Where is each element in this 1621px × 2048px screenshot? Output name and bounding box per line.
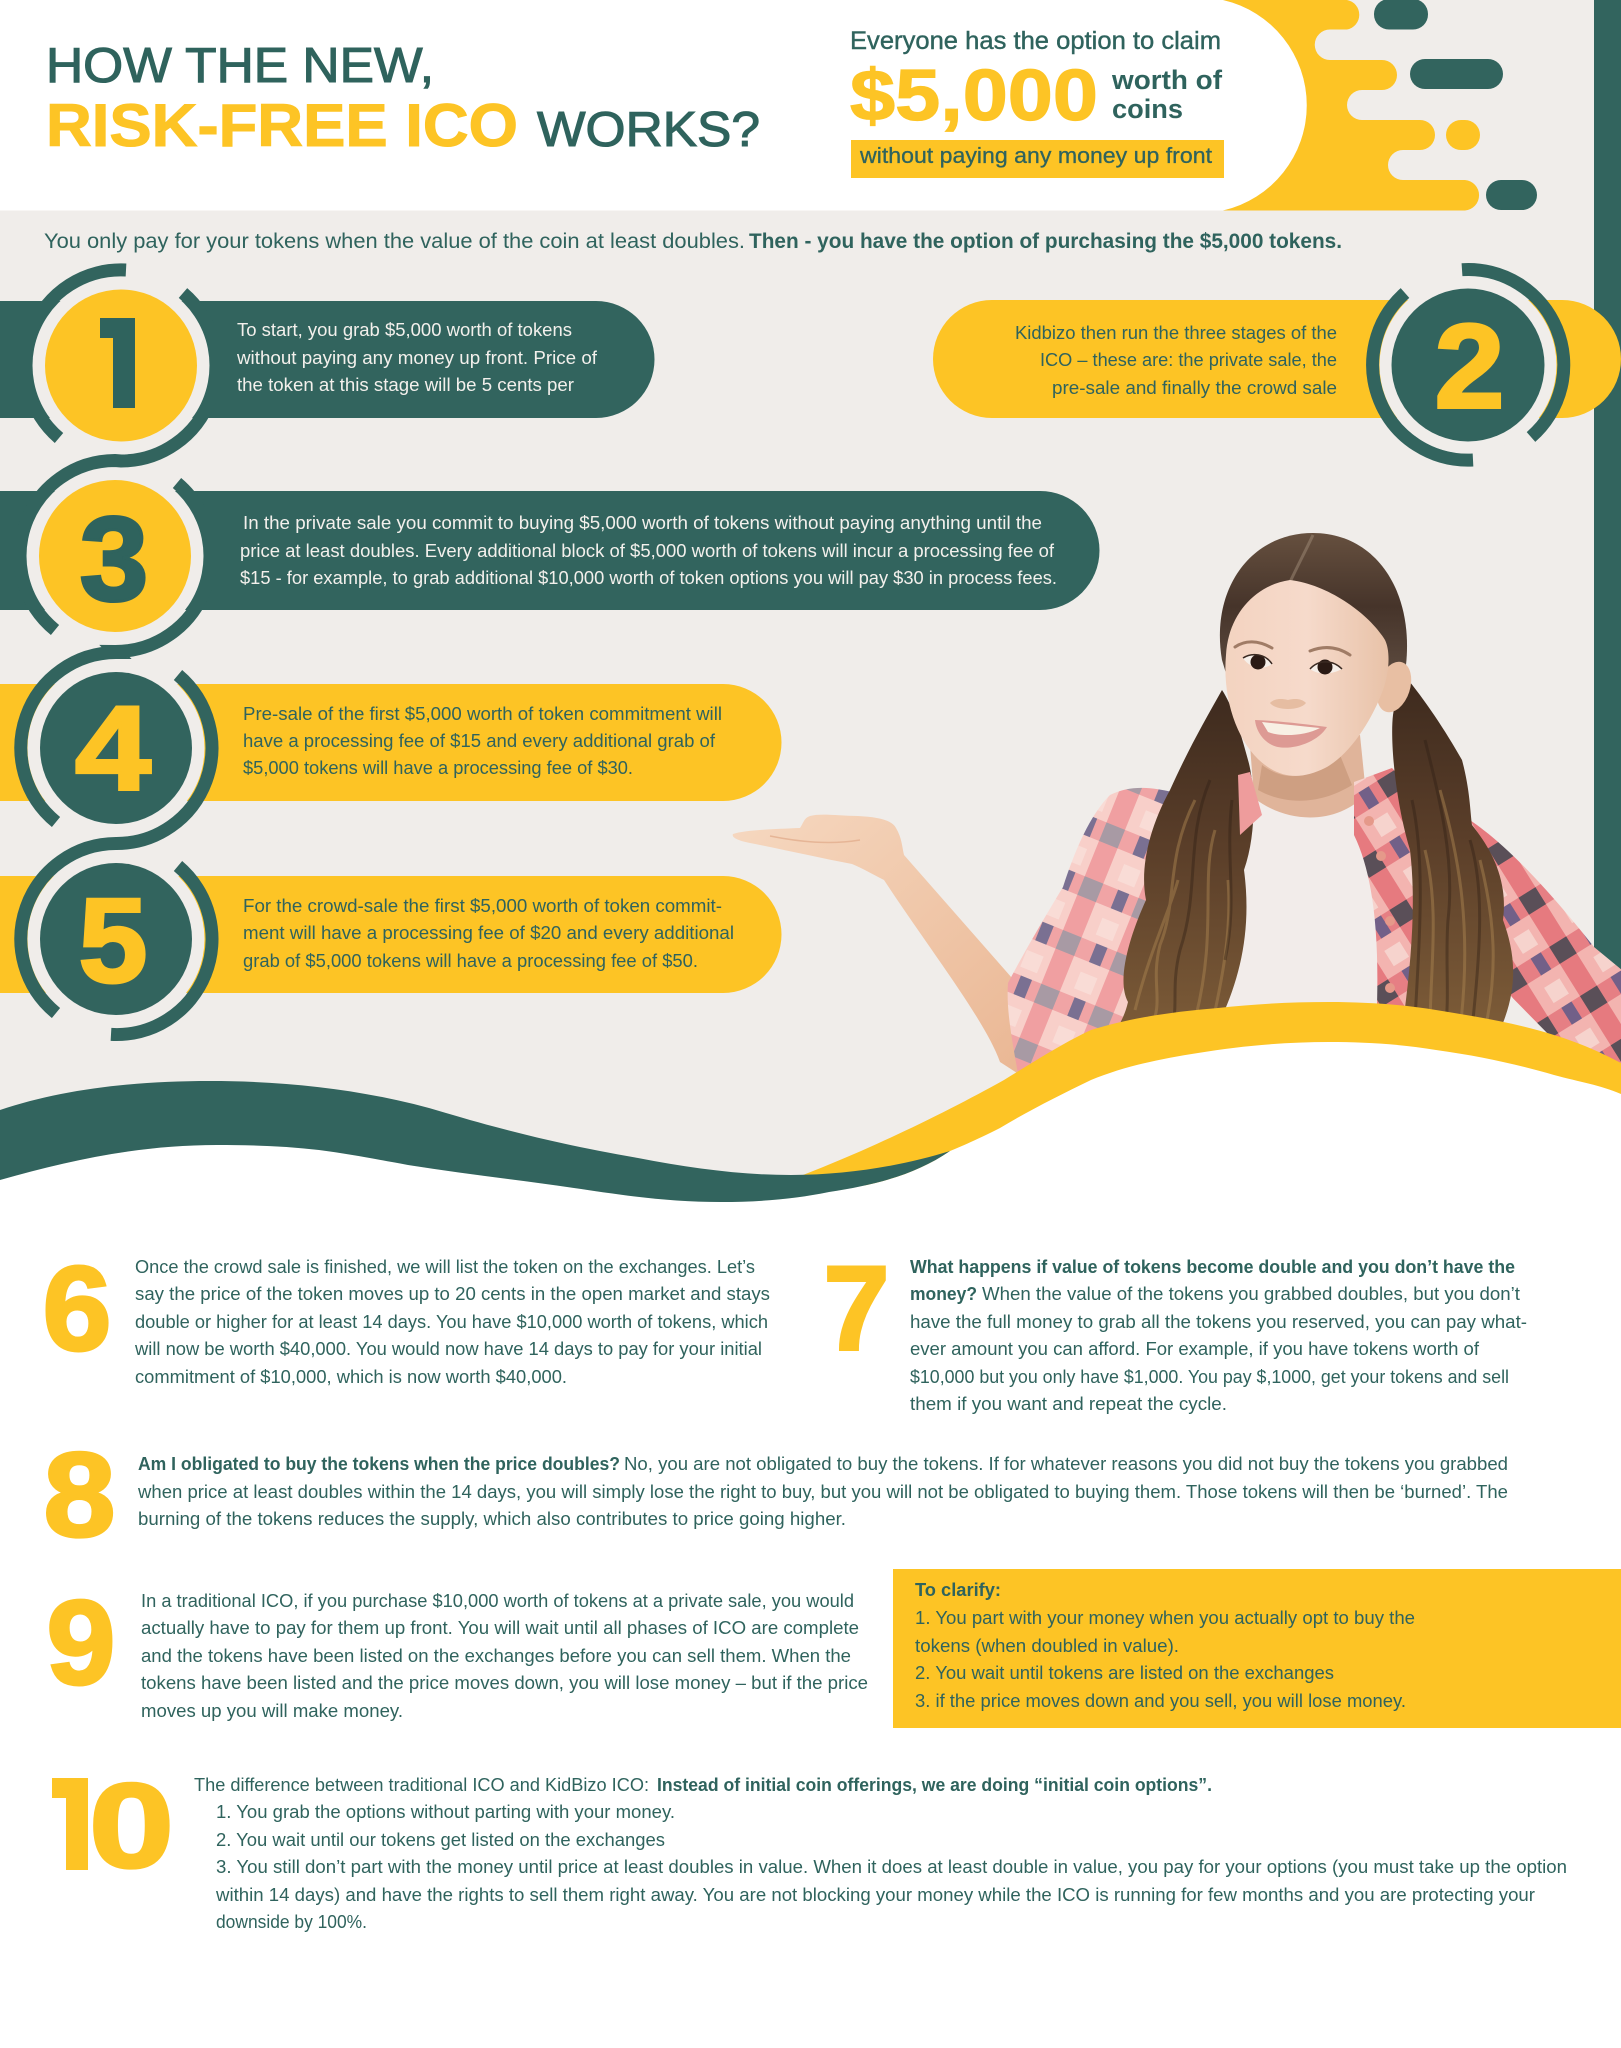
- right pigtail: [1392, 676, 1513, 1030]
- paragraph 10: downside by 100%.: [216, 1912, 367, 1932]
- paragraph 10: 2. You wait until our tokens get listed on the exchanges: [216, 1830, 665, 1850]
- neck: [1250, 735, 1366, 817]
- step 2 text: Kidbizo then run the three stages of the: [1015, 323, 1337, 343]
- decorative pills: [1374, 0, 1537, 210]
- paragraph 9: moves up you will make money.: [141, 1701, 403, 1721]
- bar 4: [0, 684, 782, 801]
- ring arcs: [20, 269, 1564, 1035]
- paragraph 6: Once the crowd sale is finished, we will list the token on the exchanges. Let’s: [135, 1257, 755, 1277]
- cream upper panel: [0, 0, 1621, 1210]
- paragraph 9: tokens have been listed and the price moves down, you will lose money – but if the price: [141, 1673, 868, 1693]
- claim callout: without paying any money up front: [859, 143, 1212, 168]
- paragraph 10: The difference between traditional ICO and KidBizo ICO:: [194, 1775, 649, 1795]
- number 6: 6: [42, 1242, 112, 1376]
- step 5 badge: 5: [78, 874, 148, 1008]
- section 8: [44, 1428, 1508, 1562]
- step 4 text: $5,000 tokens will have a processing fee of $30.: [243, 758, 633, 778]
- paragraph 9: [141, 1591, 868, 1721]
- paragraph 9: actually have to pay for them up front. You will wait until all phases of ICO are complete: [141, 1618, 859, 1638]
- step 5 text: grab of $5,000 tokens will have a processing fee of $50.: [243, 951, 698, 971]
- clarify callout: 3. if the price moves down and you sell, you will lose money.: [915, 1691, 1406, 1711]
- button placket: [1354, 768, 1424, 1030]
- paragraph 6: say the price of the token moves up to 20 cents in the open market and stays: [135, 1284, 770, 1304]
- step 3 text: [240, 513, 1057, 588]
- paragraph 6: double or higher for at least 14 days. You have $10,000 worth of tokens, which: [135, 1312, 768, 1332]
- paragraph 8: when price at least doubles within the 14 days, you will simply lose the right to buy, but you will not be obligated to buying them. Those tokens will then be ‘burned’. The: [137, 1482, 1508, 1502]
- eyebrows: [1235, 642, 1350, 655]
- paragraph 8: [137, 1454, 1508, 1529]
- mouth: [1255, 720, 1327, 748]
- connector: circle 4 to circle 5: [21, 675, 212, 1013]
- paragraph 10: within 14 days) and have the rights to sell them right away. You are not blocking your money while the ICO is running for few months and you are protecting your: [215, 1885, 1535, 1905]
- head hair: [1220, 533, 1407, 680]
- clarify callout: 1. You part with your money when you actually opt to buy the: [915, 1608, 1415, 1628]
- step 2 text: ICO – these are: the private sale, the: [1040, 350, 1337, 370]
- step 3 text: price at least doubles. Every additional block of $5,000 worth of tokens will incur a processing fee of: [240, 541, 1055, 561]
- left pigtail: [1110, 690, 1254, 1038]
- clarify callout: tokens (when doubled in value).: [915, 1636, 1179, 1656]
- chin shadow: [1258, 755, 1352, 801]
- illustration: girl presenting: [733, 533, 1621, 1085]
- step 2 badge: 2: [1434, 300, 1504, 434]
- step bars: [0, 300, 1621, 993]
- intro sentence: [44, 230, 1342, 253]
- step 1 text: the token at this stage will be 5 cents per: [237, 375, 574, 395]
- step 4 text: Pre-sale of the first $5,000 worth of token commitment will: [243, 704, 722, 724]
- paragraph 6: will now be worth $40,000. You would now have 14 days to pay for your initial: [134, 1339, 762, 1359]
- step 3 text: In the private sale you commit to buying $5,000 worth of tokens without paying anything until the: [243, 513, 1042, 533]
- arc: circle 1 upper left: [26, 270, 126, 438]
- ear: [1371, 657, 1417, 717]
- step 4 text: have a processing fee of $15 and every additional grab of: [243, 731, 716, 751]
- paragraph 7: [910, 1257, 1527, 1414]
- clarify callout: 2. You wait until tokens are listed on the exchanges: [915, 1663, 1334, 1683]
- claim callout: worth of: [1111, 65, 1223, 95]
- step 2 badge: [1380, 276, 1556, 454]
- step 3 badge: [26, 468, 204, 644]
- intro sentence: You only pay for your tokens when the value of the coin at least doubles.: [44, 230, 745, 253]
- bar 5: [0, 876, 782, 993]
- hair parting: [1290, 535, 1313, 582]
- section 7: [824, 1242, 1527, 1414]
- collar left edge: [1238, 772, 1262, 835]
- section 6: [42, 1242, 770, 1387]
- header panel: [0, 0, 1537, 210]
- arc: circle 2 lower left: [1373, 293, 1473, 460]
- step 5 text: [243, 896, 734, 971]
- claim callout: coins: [1112, 94, 1183, 124]
- arc: circle 5 lower right: [111, 866, 212, 1035]
- buttons: [1364, 816, 1395, 993]
- step 3 text: $15 - for example, to grab additional $10,000 worth of token options you will pay $30 in process fees.: [240, 568, 1057, 588]
- paragraph 6: commitment of $10,000, which is now worth $40,000.: [135, 1367, 567, 1387]
- paragraph 7: What happens if value of tokens become double and you don’t have the: [910, 1257, 1515, 1277]
- dark wave: [0, 1081, 950, 1202]
- bar 3: [0, 491, 1100, 610]
- paragraph 7: have the full money to grab all the tokens you reserved, you can pay what-: [910, 1312, 1527, 1332]
- section 10: [52, 1778, 1566, 1932]
- clarify callout: To clarify:: [915, 1580, 1001, 1600]
- face: [1225, 580, 1389, 776]
- hair strands: [1135, 740, 1493, 1030]
- right stripe: [1594, 0, 1621, 1075]
- step 4 badge: 4: [75, 682, 151, 816]
- title: [46, 39, 760, 159]
- paragraph 10: [194, 1775, 1567, 1932]
- paragraph 6: [134, 1257, 770, 1387]
- number 7: 7: [824, 1242, 890, 1376]
- claim callout: Everyone has the option to claim: [850, 27, 1221, 55]
- paragraph 10: Instead of initial coin offerings, we are doing “initial coin options”.: [657, 1775, 1212, 1795]
- white header background: [0, 0, 1307, 210]
- paragraph 10: 3. You still don’t part with the money until price at least doubles in value. When it does at least double in value, you pay for your options (you must take up the option: [216, 1857, 1567, 1877]
- arc: circle 2 upper right: [1462, 269, 1564, 437]
- paragraph 9: and the tokens have been listed on the exchanges before you can sell them. When the: [141, 1646, 851, 1666]
- paragraph 10: 1. You grab the options without parting with your money.: [216, 1802, 675, 1822]
- step 5 badge: [28, 850, 204, 1028]
- step 3 badge: 3: [80, 492, 148, 626]
- paragraph 7: $10,000 but you only have $1,000. You pay $,1000, get your tokens and sell: [910, 1367, 1509, 1387]
- bar 1: [0, 301, 655, 418]
- claim callout: $5,000: [850, 56, 1098, 136]
- paragraph 7: them if you want and repeat the cycle.: [910, 1394, 1227, 1414]
- step 4 text: [243, 704, 722, 778]
- eyes: [1243, 654, 1342, 674]
- number 10: 1: [42, 1760, 109, 1894]
- claim callout: [850, 27, 1224, 178]
- number 9: 9: [46, 1576, 116, 1710]
- palm crease: [770, 836, 860, 843]
- number 8: 8: [44, 1428, 116, 1562]
- intro sentence: Then - you have the option of purchasing the $5,000 tokens.: [749, 230, 1342, 253]
- step 5 text: ment will have a processing fee of $20 and every additional: [243, 923, 734, 943]
- white lower panel: [0, 1042, 1621, 1220]
- yellow wave: [803, 1002, 1621, 1200]
- number 10: [52, 1778, 170, 1870]
- paragraph 7: money?: [910, 1284, 977, 1304]
- title: RISK-FREE ICO: [46, 92, 518, 159]
- number 10: 0: [89, 1759, 174, 1893]
- step 5 text: For the crowd-sale the first $5,000 worth of token commit-: [243, 896, 722, 916]
- step 1 text: [236, 320, 598, 395]
- connector: circle 1 to circle 3: [20, 293, 216, 630]
- bar 2: [933, 300, 1621, 418]
- nose: [1270, 699, 1306, 709]
- step 2 text: pre-sale and finally the crowd sale: [1052, 378, 1337, 398]
- step 1 text: without paying any money up front. Price of: [236, 348, 598, 368]
- paragraph 8: burning of the tokens reduces the supply, which also contributes to price going higher.: [138, 1509, 846, 1529]
- paragraph 9: In a traditional ICO, if you purchase $10,000 worth of tokens at a private sale, you would: [141, 1591, 854, 1611]
- white t-shirt: [1212, 795, 1385, 1030]
- step 2 text: [1015, 323, 1337, 398]
- step 1 badge: 1: [87, 298, 154, 432]
- left sleeve and shirt front: [1008, 788, 1268, 1085]
- clarify callout: [893, 1569, 1621, 1728]
- section 9: [46, 1569, 1621, 1728]
- arm and hand: [733, 815, 1020, 1075]
- step 4 badge: [28, 660, 204, 836]
- paragraph 7: When the value of the tokens you grabbed doubles, but you don’t: [982, 1284, 1520, 1304]
- connector: circle 3 to circle 4: [21, 483, 211, 822]
- paragraph 7: ever amount you can afford. For example, if you have tokens worth of: [910, 1339, 1480, 1359]
- step 1 text: To start, you grab $5,000 worth of tokens: [237, 320, 572, 340]
- right sleeve: [1450, 815, 1621, 1070]
- title: HOW THE NEW,: [46, 39, 434, 93]
- yellow splash shape: [1223, 0, 1479, 210]
- step 1 badge: [32, 290, 210, 442]
- paragraph 8: Am I obligated to buy the tokens when the price doubles?: [138, 1454, 620, 1474]
- title: WORKS?: [537, 103, 760, 157]
- paragraph 8: No, you are not obligated to buy the tokens. If for whatever reasons you did not buy the tokens you grabbed: [624, 1454, 1508, 1474]
